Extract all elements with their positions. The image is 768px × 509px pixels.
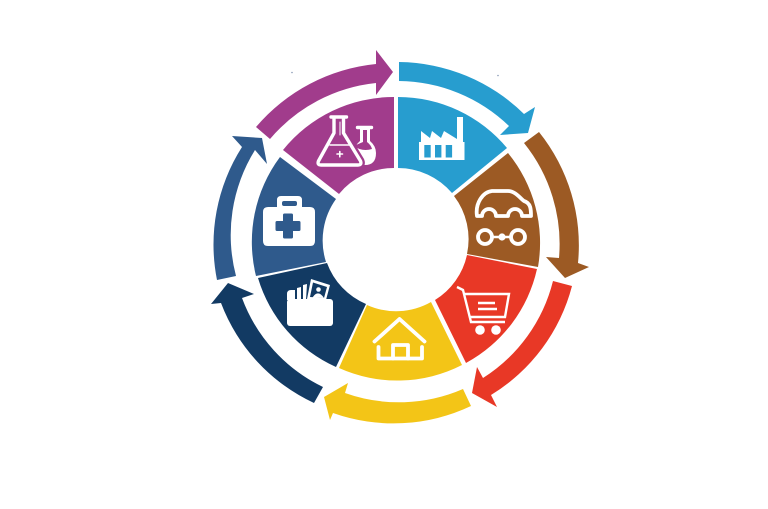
- panel: industry segment: [398, 97, 507, 193]
- panel: transport segment: [454, 153, 540, 267]
- arrow: yellow: [324, 383, 471, 423]
- panel: science segment: [283, 97, 394, 194]
- panel: finance segment: [258, 263, 366, 367]
- icon: medical kit: [263, 196, 315, 246]
- arrow: brown: [524, 132, 589, 278]
- icon: wallet with banknotes: [287, 279, 333, 326]
- icon: laboratory flasks: [318, 117, 376, 165]
- arrow: navy: [211, 283, 323, 403]
- icon: factory: [419, 117, 464, 160]
- icon: car and axle: [477, 191, 531, 244]
- icon: shopping cart: [457, 287, 509, 335]
- arrow: red: [472, 281, 572, 407]
- panel: housing segment: [339, 302, 462, 381]
- panel: retail segment: [435, 255, 537, 363]
- arrow: blue: [399, 62, 535, 135]
- arrow: steel blue: [213, 136, 267, 280]
- panel: health segment: [252, 157, 336, 276]
- arrow: purple: [256, 50, 393, 139]
- icon: house: [374, 319, 424, 358]
